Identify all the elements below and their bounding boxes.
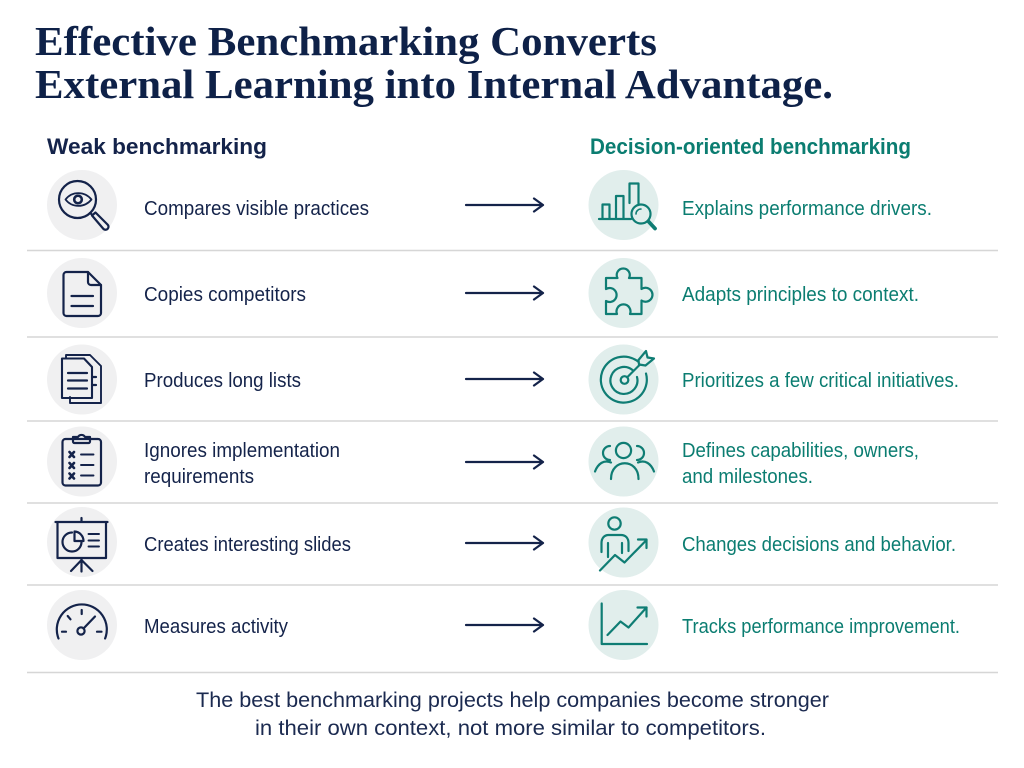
row 5: slides to decisions (47, 507, 956, 578)
arrow (466, 372, 543, 386)
icon: puzzle piece (588, 258, 658, 328)
text: ignores implementation requirements: requirements (144, 466, 254, 488)
arrow (466, 536, 543, 550)
text: explains performance drivers: Explains performance drivers. (682, 198, 932, 220)
closing statement: in their own context, not more similar to competitors. (255, 716, 766, 740)
closing statement (196, 688, 829, 740)
icon: bar chart with magnifier (588, 170, 658, 240)
icon: document (47, 258, 117, 328)
title (35, 18, 833, 107)
icon: clipboard checklist (47, 426, 117, 496)
text: ignores implementation requirements (144, 440, 340, 488)
row 4: implementation to capabilities (47, 426, 919, 496)
text: creates interesting slides: Creates interesting slides (144, 534, 351, 556)
icon: person with growth arrow (588, 508, 658, 578)
text: defines capabilities, owners, and milestones: and milestones. (682, 466, 813, 488)
icon: target with arrow (588, 344, 658, 414)
row 6: activity to performance improvement (47, 590, 960, 660)
text: adapts principles to context: Adapts principles to context. (682, 284, 919, 306)
arrow (466, 618, 543, 632)
text: copies competitors: Copies competitors (144, 284, 306, 306)
row 1: practices to performance drivers (47, 170, 932, 240)
arrow (466, 198, 543, 212)
text: prioritizes a few critical initiatives: Prioritizes a few critical initiatives. (682, 370, 959, 392)
title: Effective Benchmarking Converts (35, 18, 657, 64)
text: changes decisions and behavior: Changes decisions and behavior. (682, 534, 956, 556)
text: tracks performance improvement: Tracks performance improvement. (682, 616, 960, 638)
heading: weak benchmarking: Weak benchmarking (47, 134, 267, 159)
closing statement: The best benchmarking projects help companies become stronger (196, 688, 829, 712)
arrow (466, 456, 543, 468)
text: measures activity: Measures activity (144, 616, 288, 638)
row 2: competitors to context (47, 258, 919, 328)
arrow (466, 286, 543, 300)
text: defines capabilities, owners, and milestones: Defines capabilities, owners, (682, 440, 919, 462)
icon: document stack (47, 344, 117, 414)
text: ignores implementation requirements: Ignores implementation (144, 440, 340, 462)
icon: team of people (588, 426, 658, 496)
icon: presentation board (47, 507, 117, 577)
icon: eye in magnifying glass (47, 170, 117, 240)
icon: speedometer gauge (47, 590, 117, 660)
heading: decision-oriented benchmarking: Decision-oriented benchmarking (590, 134, 911, 159)
icon: line chart trending up (588, 590, 658, 660)
text: produces long lists: Produces long lists (144, 370, 301, 392)
row 3: long lists to critical initiatives (47, 344, 959, 414)
text: defines capabilities, owners, and milestones (682, 440, 919, 488)
title: External Learning into Internal Advantage. (35, 61, 833, 107)
text: compares visible practices: Compares visible practices (144, 198, 369, 220)
